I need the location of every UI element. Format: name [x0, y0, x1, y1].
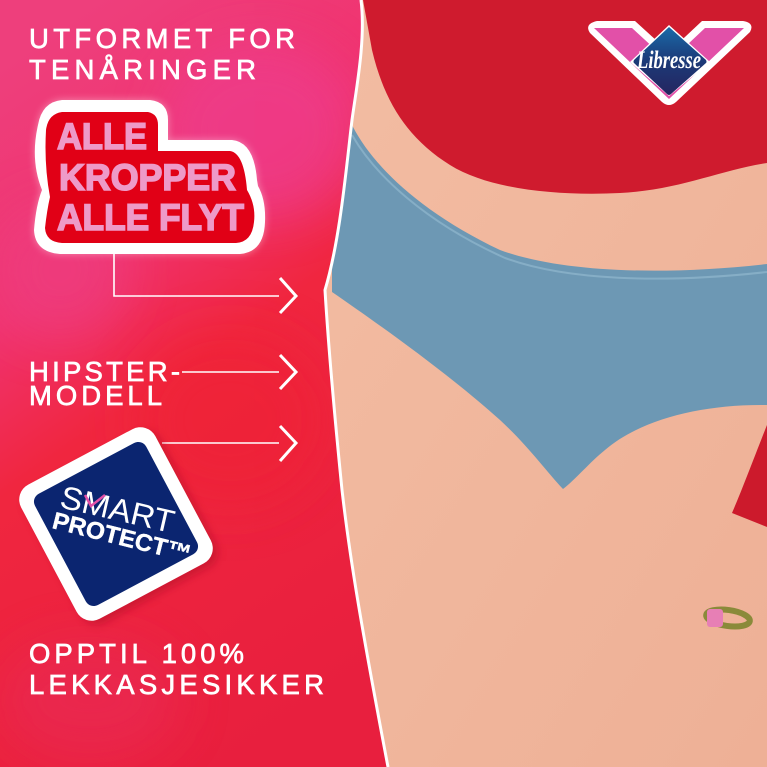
- arrow: sticker to garment: [114, 254, 296, 313]
- sticker text: ALLE: [57, 116, 147, 157]
- label: opptil 100% lekkasjesikker: LEKKASJESIKKER: [29, 669, 324, 700]
- sticker text: ALLE FLYT: [57, 197, 244, 238]
- logo: libresse: [588, 21, 751, 105]
- sticker: alle kropper alle flyt: [34, 100, 265, 254]
- heading: utformet for tenåringer: TENÅRINGER: [29, 54, 256, 85]
- left background panel with white wavy edge: [0, 0, 388, 767]
- garment: blue hipster: [332, 125, 767, 489]
- badge: smart protect: [13, 421, 224, 631]
- badge text: SMART: [57, 479, 178, 540]
- arrow: hipster label to garment: [182, 355, 296, 389]
- red sweater: [363, 0, 767, 194]
- garment waistband: [352, 135, 767, 279]
- photo area: plain colour backdrop: [300, 0, 767, 767]
- red sleeve: [732, 425, 767, 527]
- heading: utformet for tenåringer: UTFORMET FOR: [29, 23, 295, 54]
- logo wordmark: Libresse: [636, 47, 701, 74]
- label: opptil 100% lekkasjesikker: OPPTIL 100%: [29, 638, 244, 669]
- label: hipster-modell: HIPSTER-: [29, 356, 180, 387]
- ring: [705, 607, 751, 629]
- badge: smart protect: PROTECT™: [50, 507, 194, 568]
- label: hipster-modell: MODELL: [29, 380, 162, 411]
- arrow: smart protect badge to garment: [162, 426, 296, 461]
- sticker text: KROPPER: [59, 157, 236, 198]
